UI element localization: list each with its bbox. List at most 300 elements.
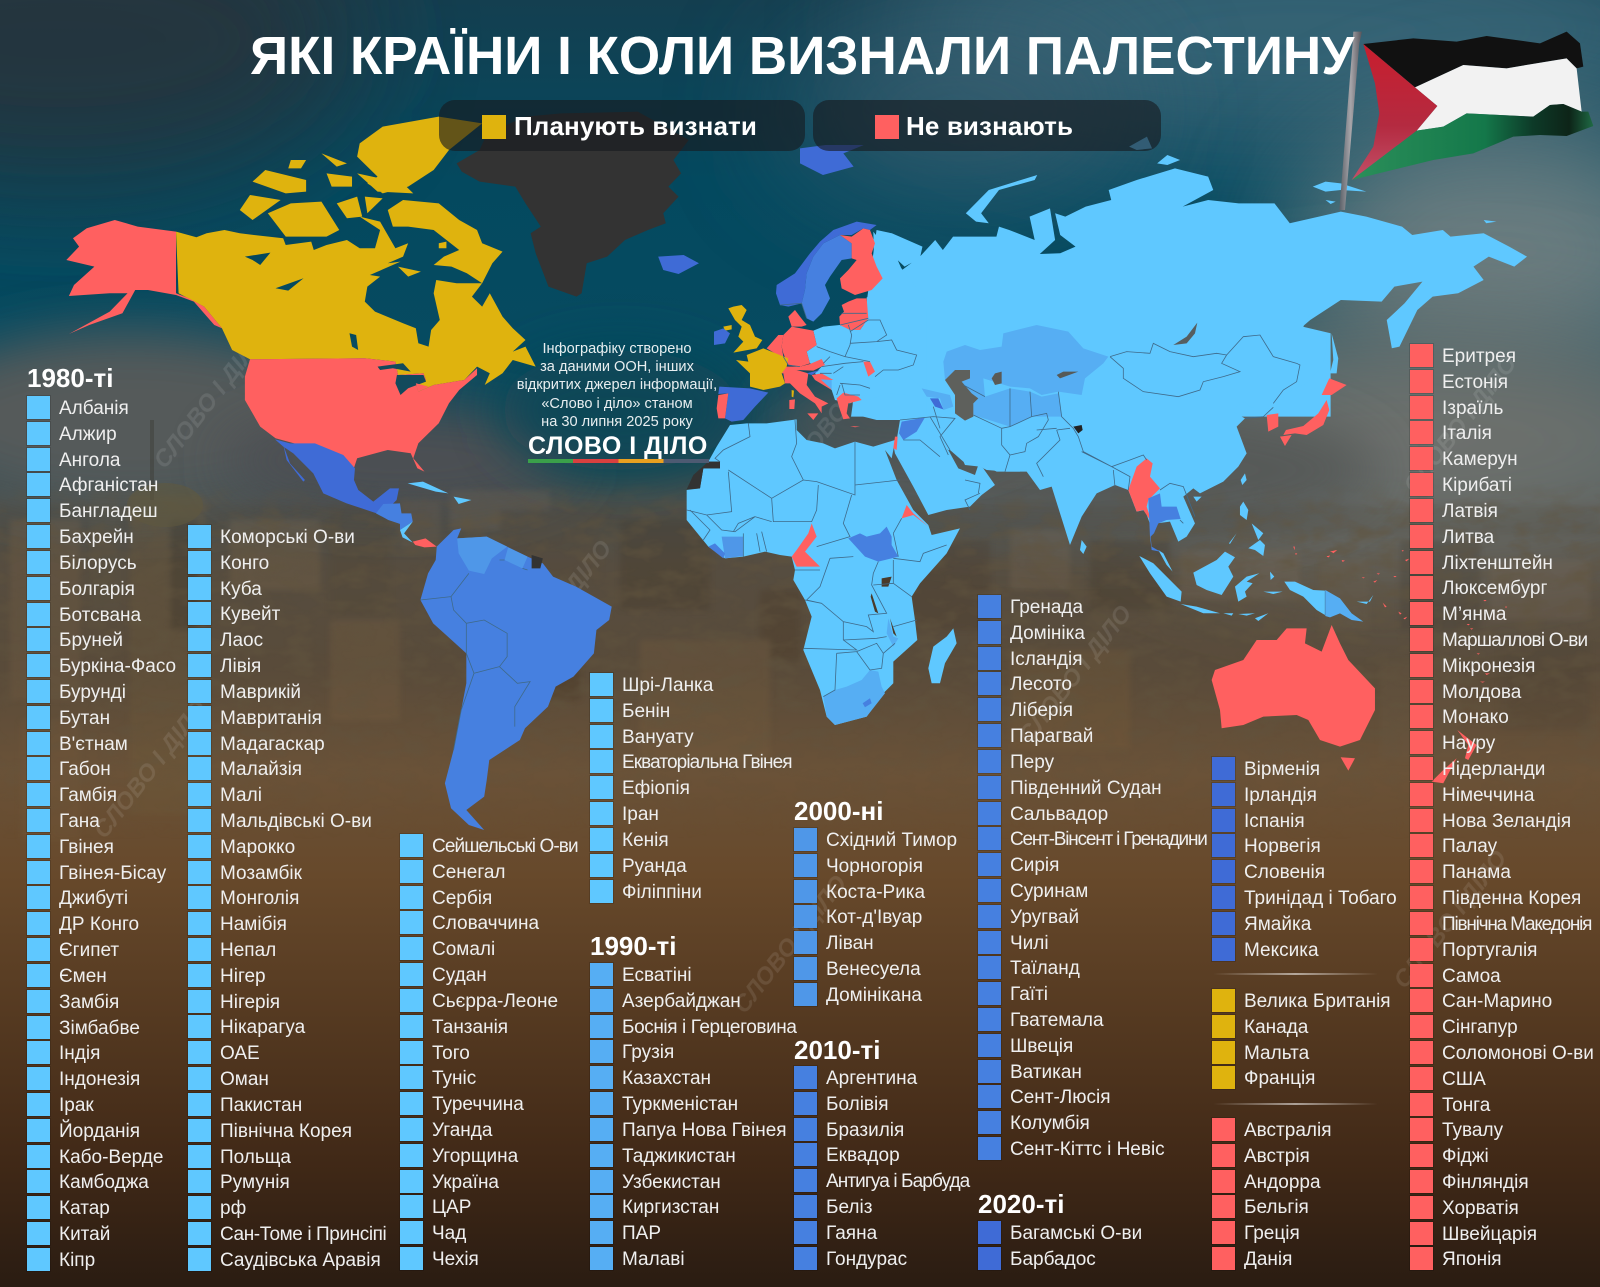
list: 1980s column 1: Гвінея <box>59 837 114 858</box>
list: 1980s column 2: Малі <box>220 785 262 806</box>
list: 2010s column 1: Гаяна <box>826 1223 877 1244</box>
Svalbard <box>800 145 864 175</box>
list: 1980s column 1: Бутан <box>59 708 110 729</box>
logo: Слово і діло: СЛОВО І ДІЛО <box>528 432 708 460</box>
list: 2010s column 1: Еквадор <box>826 1145 900 1166</box>
list: plan to recognise: Канада <box>1244 1017 1308 1038</box>
Turkey and Middle East <box>860 393 1020 472</box>
list: 1980s column 1: Замбія <box>59 992 119 1013</box>
list: 2010s column 2: Гаїті <box>1010 984 1048 1005</box>
list: 1980s column 2: Саудівська Аравія <box>220 1250 381 1271</box>
list: 1980s column 1: Катар <box>59 1198 110 1219</box>
list: 1980s column 1: Білорусь <box>59 553 137 574</box>
list: 1980s column 1: Албанія <box>59 398 129 419</box>
Arabia <box>893 437 995 515</box>
list: 2020s column 1: Барбадос <box>1010 1249 1096 1270</box>
list: 1980s column 2: Кувейт <box>220 604 280 625</box>
list: do not recognise column 2: Італія <box>1442 423 1492 444</box>
list: 2010s column 2: Колумбія <box>1010 1113 1090 1134</box>
France <box>736 348 788 390</box>
list: 1990s: Киргизстан <box>622 1197 719 1218</box>
list: 1980s column 2: Малайзія <box>220 759 302 780</box>
list: 2020s column 1 <box>978 1221 1142 1270</box>
list: 2010s column 1 <box>793 1065 970 1270</box>
list: 1990s: Папуа Нова Гвінея <box>622 1120 787 1141</box>
list: 1980s column 1: Бруней <box>59 630 123 651</box>
list: 2010s column 2: Уругвай <box>1010 907 1079 928</box>
list: do not recognise column 2: Сан-Марино <box>1442 991 1552 1012</box>
list: do not recognise column 1: Греція <box>1244 1223 1300 1244</box>
list: do not recognise column 2: Соломонові О-ви <box>1442 1043 1594 1064</box>
source note: відкритих джерел інформації, <box>517 377 717 393</box>
Papua New Guinea <box>1325 590 1363 622</box>
Alaska <box>66 220 222 334</box>
list: 2010s column 2: Суринам <box>1010 881 1088 902</box>
Spain <box>718 387 768 422</box>
heading: 2010s: 2010-ті <box>794 1035 880 1065</box>
Portugal <box>717 393 728 418</box>
region: Eurasia land <box>800 137 1527 621</box>
list: plan to recognise <box>1211 988 1391 1090</box>
region: Oceania <box>1212 547 1507 783</box>
watermarks: СЛОВО І ДІЛО <box>728 870 853 1019</box>
heading: 2020s: 2020-ті <box>978 1189 1064 1219</box>
list: do not recognise column 2: Панама <box>1442 862 1511 883</box>
list: 2010s column 1: Беліз <box>826 1197 872 1218</box>
list: 1980s column 2: Лаос <box>220 630 263 651</box>
Venezuela and Guyana <box>457 537 528 574</box>
list: 1990s: Таджикистан <box>622 1146 736 1167</box>
flag: Palestine <box>1339 32 1593 210</box>
list: 2000s <box>793 827 957 1007</box>
list: 1980s column 3: Того <box>432 1042 470 1064</box>
list: 1980s column 2: Мадагаскар <box>220 734 325 754</box>
list: 1990s: Узбекистан <box>622 1172 721 1192</box>
list: 1980s column 3: Угорщина <box>432 1146 518 1167</box>
list: 1980s column 1: Ірак <box>59 1095 94 1116</box>
list: do not recognise column 2: Молдова <box>1442 682 1521 703</box>
list: 2000s: Ліван <box>826 933 874 954</box>
list: 2020s column 2: Іспанія <box>1244 811 1305 832</box>
Denmark <box>788 310 807 327</box>
list: 2010s column 2: Сент-Вінсент і Гренадини <box>1010 829 1207 850</box>
list: 1980s column 1: Зімбабве <box>59 1018 140 1038</box>
watermarks: СЛОВО І ДІЛО <box>1013 600 1138 749</box>
Georgia and Azerbaijan <box>922 388 953 410</box>
watermarks: СЛОВО І ДІЛО <box>1388 845 1513 994</box>
Ivory Coast <box>722 537 743 558</box>
list: 2010s column 1: Антигуа і Барбуда <box>826 1171 969 1192</box>
list: 2010s column 2: Гватемала <box>1010 1010 1104 1031</box>
watermarks: СЛОВО І ДІЛО <box>1398 350 1523 499</box>
list: 1980s column 3: Судан <box>432 965 487 986</box>
list: 1990s <box>589 962 797 1270</box>
list: 1980s column 3: Україна <box>432 1172 499 1193</box>
list: 1980s column 4: Екваторіальна Гвінея <box>622 752 792 773</box>
list: 1980s column 3: Сербія <box>432 888 492 909</box>
list: 2020s column 2: Мексика <box>1244 940 1319 961</box>
list: do not recognise column 2 <box>1409 343 1594 1270</box>
list: 2010s column 2: Парагвай <box>1010 726 1093 747</box>
list: 1980s column 2: Непал <box>220 940 276 961</box>
Baikal <box>1173 323 1197 345</box>
Germany <box>782 327 817 367</box>
list: 1980s column 1: Джибуті <box>59 888 128 909</box>
source note: на 30 липня 2025 року <box>541 414 693 430</box>
list: 1980s column 1: Гана <box>59 811 100 832</box>
list: 1980s column 2: ОАЕ <box>220 1043 260 1064</box>
Iceland <box>658 255 699 274</box>
list: do not recognise column 2: Нова Зеландія <box>1442 811 1571 832</box>
Lesotho <box>863 698 872 707</box>
list: 1980s column 1: Ботсвана <box>59 604 141 626</box>
list: 1980s column 1: Індія <box>59 1043 100 1064</box>
Malawi <box>887 618 898 647</box>
list: 1980s column 2: Нікарагуа <box>220 1017 305 1038</box>
legend: do not recognise: Не визнають <box>906 111 1073 141</box>
African lakes <box>871 577 897 637</box>
list: 2020s column 2: Ірландія <box>1244 785 1317 806</box>
list: do not recognise column 2: Швейцарія <box>1442 1224 1537 1245</box>
list: 1980s column 1: Ємен <box>59 966 107 987</box>
Cameroon <box>792 523 820 567</box>
region: Central Asia and East Asia <box>930 323 1347 615</box>
list: do not recognise column 1: Австрія <box>1244 1146 1310 1167</box>
list: 1980s column 2: рф <box>220 1198 246 1219</box>
USA <box>245 358 477 472</box>
list: 2010s column 1: Гондурас <box>826 1249 907 1270</box>
region: Mexico and Central America <box>275 439 403 525</box>
list: do not recognise column 2: Нідерланди <box>1442 759 1545 780</box>
list: do not recognise column 1: Андорра <box>1244 1172 1321 1193</box>
list: 2020s column 2: Ямайка <box>1244 914 1311 935</box>
list: do not recognise column 2: Монако <box>1442 707 1509 728</box>
list: 1980s column 1 <box>26 395 176 1271</box>
list: 2000s: Венесуела <box>826 959 921 980</box>
list: do not recognise column 2: Науру <box>1442 733 1495 754</box>
list: 2020s column 2 <box>1211 756 1397 962</box>
list: 1980s column 1: Болгарія <box>59 579 135 600</box>
list: 1980s column 1: Бахрейн <box>59 527 134 548</box>
Pacific islands <box>1293 547 1507 683</box>
list: 1980s column 3: Словаччина <box>432 913 539 934</box>
list: 1990s: Грузія <box>622 1042 674 1063</box>
list: 2010s column 2: Гренада <box>1010 597 1083 618</box>
list: 1980s column 4: Іран <box>622 804 659 825</box>
list: 1980s column 2: Нігерія <box>220 992 280 1013</box>
watermarks: СЛОВО І ДІЛО <box>493 535 618 684</box>
list: do not recognise column 2: Фінляндія <box>1442 1172 1529 1193</box>
Greenland <box>457 112 689 297</box>
list: 1980s column 2 <box>187 524 386 1271</box>
Baltic states <box>839 298 868 330</box>
list: do not recognise column 2: Литва <box>1442 527 1494 548</box>
list: 2010s column 2: Ісландія <box>1010 649 1083 670</box>
Greece <box>837 393 862 427</box>
list: do not recognise column 2: Хорватія <box>1442 1198 1519 1219</box>
list: 1980s column 1: Китай <box>59 1224 110 1245</box>
legend: plan to recognise <box>439 100 805 151</box>
region: South America <box>420 528 612 830</box>
list: do not recognise column 2: Латвія <box>1442 501 1498 522</box>
list: 2010s column 2: Таїланд <box>1010 958 1080 979</box>
list: 2010s column 2: Південний Судан <box>1010 778 1162 799</box>
list: 1980s column 2: Польща <box>220 1146 291 1168</box>
list: 2010s column 2: Домініка <box>1010 623 1085 644</box>
Eritrea <box>902 505 928 527</box>
Eastern Europe <box>807 232 1020 410</box>
watermarks: СЛОВО І ДІЛО <box>148 325 273 474</box>
list: 1980s column 4 <box>589 672 792 904</box>
list: 1980s column 2: Північна Корея <box>220 1121 352 1142</box>
list: 1980s column 1: Гамбія <box>59 785 117 806</box>
Moldova <box>863 362 875 377</box>
list: do not recognise column 2: Ізраїль <box>1442 398 1503 419</box>
list: do not recognise column 2: Кірибаті <box>1442 475 1512 496</box>
list: 1990s: Казахстан <box>622 1068 711 1089</box>
list: 1980s column 3: Сенегал <box>432 862 506 883</box>
list: 1980s column 1: Ангола <box>59 450 120 471</box>
list: 1980s column 4: Кенія <box>622 830 669 851</box>
list: 2020s column 2: Словенія <box>1244 862 1325 883</box>
list: 1990s: Есватіні <box>622 965 692 986</box>
list: do not recognise column 1: Бельгія <box>1244 1197 1309 1218</box>
list: do not recognise column 1: Австралія <box>1244 1120 1332 1141</box>
list: 1980s column 2: Мавританія <box>220 708 322 729</box>
list: do not recognise column 2: Фіджі <box>1442 1146 1489 1167</box>
Arctic islands <box>966 137 1496 223</box>
list: 1980s column 1: Гвінея-Бісау <box>59 863 166 884</box>
list: 2010s column 2: Лесото <box>1010 674 1072 695</box>
list: 2020s column 2: Тринідад і Тобаго <box>1244 888 1397 909</box>
list: 1980s column 1: ДР Конго <box>59 914 139 935</box>
list: 1980s column 2: Маврикій <box>220 682 301 703</box>
watermarks: СЛОВО І ДІЛО <box>88 695 213 844</box>
list: 1980s column 2: Куба <box>220 579 262 600</box>
legend: do not recognise <box>813 100 1161 151</box>
region: North America <box>66 112 699 472</box>
list: 2010s column 2: Ліберія <box>1010 700 1073 721</box>
list: 1980s column 2: Пакистан <box>220 1095 302 1116</box>
Austria and Switzerland <box>782 359 825 373</box>
red triangle <box>1352 44 1437 180</box>
list: 2000s: Чорногорія <box>826 856 923 877</box>
list: 1980s column 3: Танзанія <box>432 1017 508 1038</box>
Madagascar <box>928 628 957 683</box>
list: do not recognise column 2: Японія <box>1442 1249 1502 1270</box>
Israel <box>893 437 898 450</box>
list: 2010s column 1: Аргентина <box>826 1068 917 1089</box>
list: 1980s column 3 <box>399 833 578 1270</box>
list: 2020s column 2: Норвегія <box>1244 836 1321 857</box>
United Kingdom <box>723 305 762 353</box>
Russia north coast <box>851 168 1527 417</box>
list: 1980s column 3: Чехія <box>432 1249 479 1270</box>
Balkhash <box>1057 372 1078 378</box>
list: do not recognise column 2: Еритрея <box>1442 346 1516 367</box>
list: 1980s column 1: Буркіна-Фасо <box>59 656 176 677</box>
list: 1980s column 3: Сьєрра-Леоне <box>432 991 558 1012</box>
list: 1990s: Боснія і Герцеговина <box>622 1017 797 1038</box>
list: 1980s column 4: Філіппіни <box>622 882 702 902</box>
list: do not recognise column 2: Палау <box>1442 836 1497 857</box>
list: 1980s column 3: Уганда <box>432 1120 492 1141</box>
green stripe <box>1352 104 1593 180</box>
source note <box>517 341 717 430</box>
Tibet dark mark <box>1073 425 1083 433</box>
list: 1980s column 3: ЦАР <box>432 1197 471 1218</box>
list: 1980s column 4: Руанда <box>622 856 687 877</box>
list: do not recognise column 2: Південна Корея <box>1442 888 1581 909</box>
list: do not recognise column 2: Португалія <box>1442 940 1537 961</box>
list: 2000s: Домінікана <box>826 985 922 1006</box>
Ireland <box>714 328 730 345</box>
list: do not recognise column 2: М’янма <box>1442 604 1506 625</box>
list: 1980s column 1: Камбоджа <box>59 1172 149 1193</box>
Asia <box>927 310 1327 545</box>
list: 1980s column 2: Румунія <box>220 1172 290 1193</box>
list: 2010s column 2: Чилі <box>1010 933 1049 954</box>
list: 1980s column 1: Алжир <box>59 424 117 445</box>
list: 2000s: Коста-Рика <box>826 882 925 903</box>
Liberia <box>708 543 725 558</box>
list: 1980s column 4: Бенін <box>622 701 670 722</box>
source note: «Слово і діло» станом <box>541 396 693 412</box>
list: 1980s column 4: Вануату <box>622 727 694 748</box>
list: 1980s column 2: Конго <box>220 553 269 574</box>
list: 2010s column 1: Болівія <box>826 1094 889 1115</box>
list: plan to recognise: Велика Британія <box>1244 991 1391 1012</box>
list: plan to recognise: Мальта <box>1244 1043 1309 1064</box>
list: 2010s column 2: Швеція <box>1010 1036 1073 1057</box>
list: 2020s column 2: Вірменія <box>1244 759 1320 780</box>
list: do not recognise column 2: Люксембург <box>1442 578 1547 599</box>
list: 2010s column 1: Бразилія <box>826 1120 904 1141</box>
list: 1980s column 1: Кіпр <box>59 1250 95 1271</box>
Benelux <box>767 335 783 357</box>
Croatia <box>812 373 833 390</box>
black stripe <box>1363 32 1583 87</box>
list: 2010s column 2: Ватикан <box>1010 1062 1082 1083</box>
list: 1980s column 2: Намібія <box>220 914 287 935</box>
list: plan to recognise: Франція <box>1244 1068 1315 1089</box>
list: 1980s column 4: Шрі-Ланка <box>622 675 713 696</box>
list: 1980s column 1: Йорданія <box>59 1121 140 1142</box>
list: 1980s column 3: Туреччина <box>432 1094 524 1115</box>
list: 1990s: Малаві <box>622 1249 685 1270</box>
white stripe <box>1415 58 1582 131</box>
list: do not recognise column 2: Самоа <box>1442 966 1501 986</box>
list: 2010s column 2: Сент-Кіттс і Невіс <box>1010 1139 1165 1160</box>
Bosnia <box>821 379 832 389</box>
list: 1980s column 1: Єгипет <box>59 940 119 961</box>
list: 1980s column 2: Оман <box>220 1069 269 1090</box>
list: 1980s column 1: Індонезія <box>59 1069 140 1090</box>
list: do not recognise column 2: Німеччина <box>1442 785 1534 806</box>
list: 2010s column 2: Сент-Люсія <box>1010 1087 1111 1108</box>
Canada <box>176 217 536 392</box>
list: 1980s column 3: Чад <box>432 1223 466 1244</box>
list: do not recognise column 2: Естонія <box>1442 372 1508 393</box>
Japan <box>1280 378 1347 557</box>
list: 1980s column 1: Бангладеш <box>59 501 158 522</box>
list: 1980s column 2: Сан-Томе і Принсіпі <box>220 1224 386 1245</box>
South Korea <box>1267 413 1278 432</box>
list: 1980s column 2: Мозамбік <box>220 863 302 884</box>
watermarks: СЛОВО І ДІЛО <box>778 335 903 484</box>
Myanmar <box>1128 458 1160 532</box>
list: do not recognise column 2: Сінгапур <box>1442 1017 1518 1038</box>
heading: 2000s: 2000-ні <box>794 796 883 826</box>
list: do not recognise column 2: Камерун <box>1442 449 1518 470</box>
South Africa <box>823 670 885 725</box>
French Guiana <box>532 555 543 568</box>
list: 1990s: Азербайджан <box>622 991 741 1012</box>
list: do not recognise column 1: Данія <box>1244 1249 1292 1270</box>
list: 1980s column 2: Монголія <box>220 888 299 909</box>
list: 2010s column 2: Сирія <box>1010 855 1059 876</box>
list: do not recognise column 2: Маршаллові О-ви <box>1442 630 1587 651</box>
list: do not recognise column 2: Тувалу <box>1442 1120 1503 1141</box>
Italy <box>783 370 828 420</box>
list: 1990s: ПАР <box>622 1223 661 1244</box>
list: 1980s column 1: Кабо-Верде <box>59 1147 163 1168</box>
Asian islands <box>1080 333 1338 621</box>
source note: Інфографіку створено <box>542 341 692 357</box>
list: 2010s column 2: Перу <box>1010 752 1054 773</box>
list: 1980s column 3: Сейшельські О-ви <box>432 836 578 857</box>
list: 1980s column 1: Габон <box>59 759 111 780</box>
Caspian Sea <box>945 370 978 421</box>
list: 1990s: Туркменістан <box>622 1094 738 1115</box>
heading: 1990s: 1990-ті <box>590 931 676 961</box>
list: 1980s column 1: Афганістан <box>59 475 158 496</box>
Finland <box>840 228 883 295</box>
list: 1980s column 2: Лівія <box>220 656 261 677</box>
Western Sahara <box>687 462 720 489</box>
list: 1980s column 3: Сомалі <box>432 939 495 960</box>
list: 1980s column 2: Коморські О-ви <box>220 527 355 548</box>
Norway <box>776 222 877 307</box>
list: 1980s column 2: Марокко <box>220 837 295 858</box>
list: do not recognise column 2: США <box>1442 1069 1486 1090</box>
list: 1980s column 3: Туніс <box>432 1068 476 1089</box>
Thailand <box>1148 493 1181 555</box>
region: Africa <box>687 419 960 725</box>
list: 2020s column 1: Багамські О-ви <box>1010 1223 1142 1244</box>
flagpole <box>1339 32 1362 210</box>
list: do not recognise column 2: Ліхтенштейн <box>1442 552 1553 574</box>
Syria <box>899 417 925 440</box>
Slovenia <box>807 370 820 375</box>
list: 1980s column 1: В'єтнам <box>59 734 128 755</box>
Kazakhstan <box>943 325 1108 397</box>
list: 1980s column 1: Бурунді <box>59 682 126 703</box>
list: 1980s column 2: Нігер <box>220 966 266 987</box>
legend: plan to recognise: Планують визнати <box>514 111 757 141</box>
list: 1980s column 2: Мальдівські О-ви <box>220 811 372 832</box>
list: 2000s: Кот-д'Івуар <box>826 907 922 928</box>
list: 2010s column 2: Сальвадор <box>1010 804 1108 824</box>
list: do not recognise column 1 <box>1211 1117 1332 1270</box>
New Zealand <box>1432 730 1477 783</box>
list: 2010s column 2 <box>977 594 1207 1161</box>
list: do not recognise column 2: Тонга <box>1442 1095 1490 1116</box>
South Sudan <box>848 527 898 562</box>
list: 1980s column 4: Ефіопія <box>622 778 690 799</box>
Armenia <box>930 398 943 409</box>
heading: 1980s: 1980-ті <box>27 363 113 393</box>
